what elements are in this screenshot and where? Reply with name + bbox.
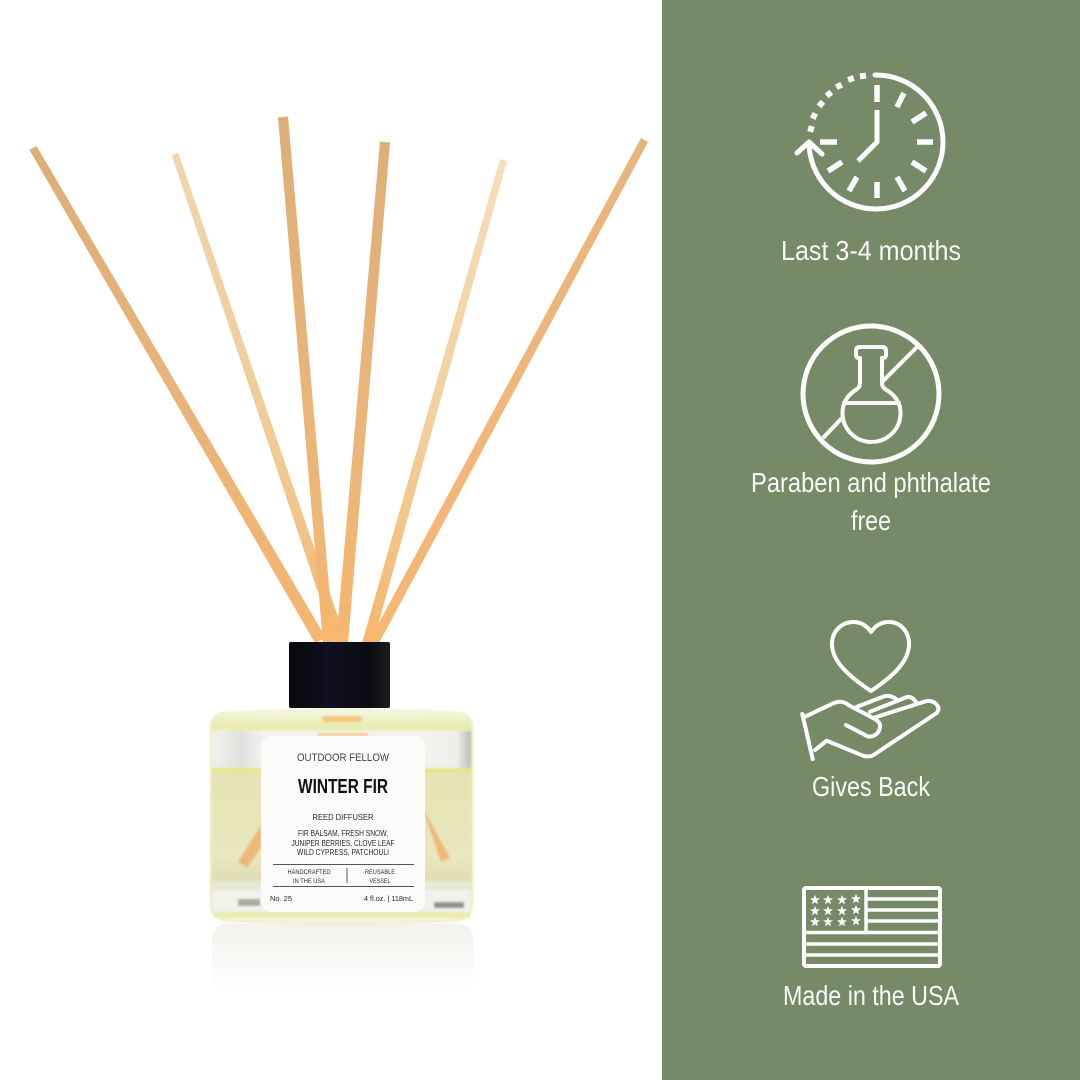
reeds [30, 116, 648, 643]
glass bottle [211, 710, 472, 923]
product label [261, 736, 425, 912]
submerged reeds [238, 825, 261, 868]
black cap [289, 642, 390, 708]
orange reflections at the neck [322, 716, 362, 722]
product: reed diffuser [30, 116, 648, 992]
background [0, 0, 662, 1080]
caption: paraben and phthalate free: Paraben and phthalate [751, 467, 991, 498]
icon: heart over open hand [802, 622, 938, 759]
label details: IN THE USA [293, 878, 326, 885]
icon: crossed-out flask [803, 326, 939, 462]
label details: No. 25 [270, 894, 292, 903]
label details [270, 864, 414, 903]
product name: WINTER FIR [298, 776, 388, 798]
liquid [212, 771, 472, 881]
label details: HANDCRAFTED [288, 869, 331, 876]
brand: OUTDOOR FELLOW [297, 752, 390, 764]
label details: REUSABLE [365, 869, 396, 876]
green panel [662, 0, 1080, 1080]
scent notes [292, 829, 395, 857]
label details: VESSEL [370, 878, 391, 885]
icon: american flag [804, 888, 940, 966]
scent notes: WILD CYPRESS, PATCHOULI [297, 848, 389, 857]
reflection under bottle [212, 924, 473, 992]
caption: paraben and phthalate free [751, 467, 991, 536]
icon: clock with circular arrow [797, 73, 943, 209]
caption: last 3-4 months: Last 3-4 months [781, 235, 961, 266]
scent notes: JUNIPER BERRIES, CLOVE LEAF [292, 839, 395, 848]
label details: 4 fl.oz. | 118mL [364, 894, 413, 903]
scent notes: FIR BALSAM, FRESH SNOW, [298, 829, 388, 838]
caption: made in the usa: Made in the USA [783, 980, 959, 1011]
caption: paraben and phthalate free: free [851, 505, 891, 536]
product type: REED DIFFUSER [312, 812, 374, 822]
caption: gives back: Gives Back [812, 771, 931, 802]
